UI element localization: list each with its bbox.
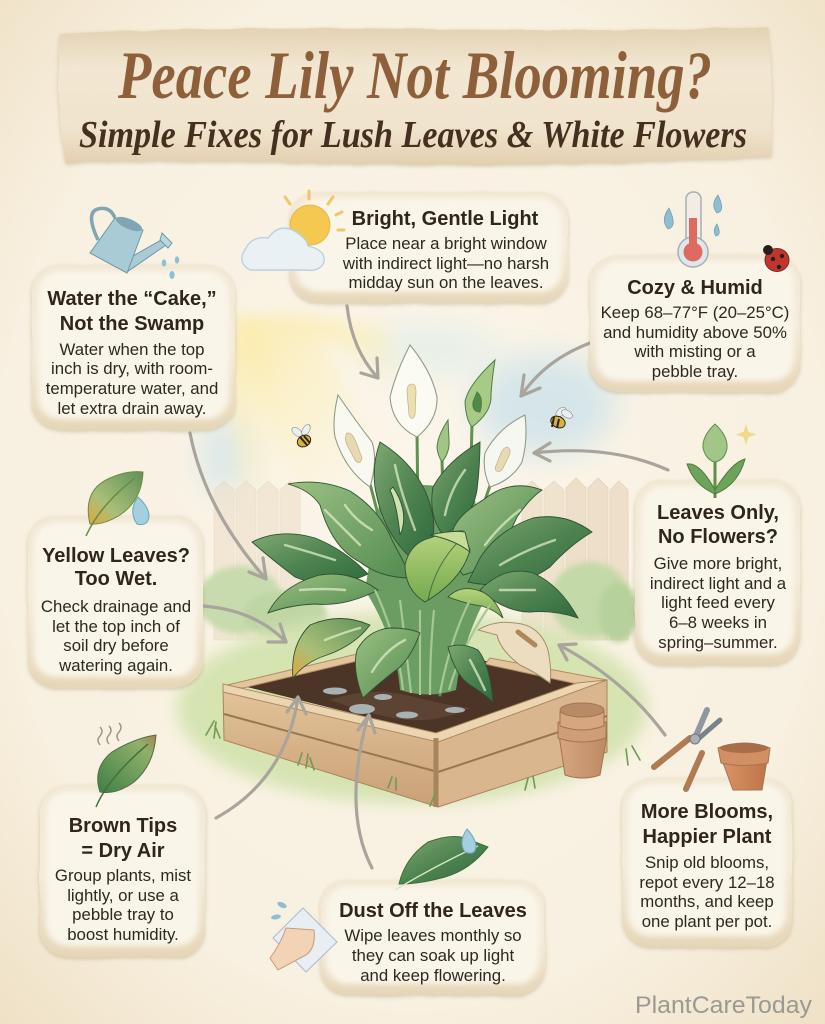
body text: lightly, or use a xyxy=(67,886,179,905)
panel: yellow leaves xyxy=(28,516,203,688)
body text xyxy=(650,554,787,652)
body text: temperature water, and xyxy=(46,379,218,398)
body text: they can soak up light xyxy=(352,946,514,965)
bed right face xyxy=(438,680,607,807)
icon: watering can xyxy=(90,208,179,279)
heading: Dust Off the Leaves xyxy=(339,900,527,922)
body text xyxy=(55,866,191,944)
spathe: right flower xyxy=(484,415,526,487)
body text: indirect light and a xyxy=(650,574,787,593)
arrow: more blooms xyxy=(559,644,665,735)
center bright leaf xyxy=(405,531,470,602)
lawn xyxy=(177,612,647,804)
body text: let the top inch of xyxy=(52,617,180,636)
bee: right xyxy=(549,405,574,430)
body text: Give more bright, xyxy=(654,554,782,573)
raised garden bed xyxy=(223,654,607,807)
bed back rim xyxy=(223,654,607,688)
body text: with misting or a xyxy=(633,342,756,361)
flower stems xyxy=(366,425,492,695)
body text: midday sun on the leaves. xyxy=(349,273,543,292)
body text xyxy=(344,926,522,985)
drooping brown flower xyxy=(478,622,551,683)
body text: boost humidity. xyxy=(67,925,179,944)
heading: No Flowers? xyxy=(658,526,778,548)
icon: ladybug xyxy=(763,245,789,272)
body text: pebble tray to xyxy=(72,905,174,924)
body text: Wipe leaves monthly so xyxy=(344,926,522,945)
heading: Happier Plant xyxy=(643,826,772,848)
title banner xyxy=(58,27,772,164)
body text: watering again. xyxy=(58,656,173,675)
body text: with indirect light—no harsh xyxy=(342,254,549,273)
body text: light feed every xyxy=(661,593,776,612)
body text xyxy=(342,234,549,292)
arrow: yellow leaves xyxy=(203,606,286,642)
back leaves xyxy=(252,442,592,618)
icon: sprout xyxy=(687,424,756,498)
garden scene xyxy=(177,315,647,807)
arrow: light xyxy=(347,306,378,378)
heading: Cozy & Humid xyxy=(627,277,763,299)
sky wash xyxy=(199,326,615,495)
panel: brown tips xyxy=(40,785,205,957)
stacked terracotta pots xyxy=(558,703,607,778)
subtitle: Simple Fixes for Lush Leaves & White Flowers xyxy=(79,114,747,156)
body text: and humidity above 50% xyxy=(603,323,787,342)
body text: months, and keep xyxy=(640,892,774,911)
green buds xyxy=(437,360,495,462)
heading: Too Wet. xyxy=(75,568,157,590)
body text: Keep 68–77°F (20–25°C) xyxy=(601,303,789,322)
base petioles xyxy=(375,590,490,695)
body text xyxy=(41,597,191,675)
body text: spring–summer. xyxy=(658,633,778,652)
body text: 6–8 weeks in xyxy=(669,613,767,632)
body text: Snip old blooms, xyxy=(645,853,769,872)
icon: shiny leaf xyxy=(395,829,488,890)
body text: soil dry before xyxy=(63,636,169,655)
grass tufts xyxy=(206,721,640,806)
icon: pruning shears xyxy=(654,710,720,789)
body text: one plant per pot. xyxy=(642,912,772,931)
icon: yellow leaf and drop xyxy=(86,472,149,536)
body text: let extra drain away. xyxy=(58,399,206,418)
arrow: humidity xyxy=(521,343,590,396)
icon: terracotta pot xyxy=(718,743,770,790)
body text: inch is dry, with room- xyxy=(51,359,213,378)
heading: Bright, Gentle Light xyxy=(352,208,539,230)
bushes xyxy=(198,562,638,642)
body text: Place near a bright window xyxy=(345,234,548,253)
icon: hand with cloth xyxy=(270,901,337,972)
soil xyxy=(243,661,577,734)
lower leaves xyxy=(293,618,493,702)
heading xyxy=(657,502,779,548)
body text xyxy=(639,853,775,931)
heading: Yellow Leaves? xyxy=(42,545,190,567)
panel: bright light xyxy=(290,192,568,303)
panel: leaves only xyxy=(635,480,800,665)
bed top rim and plank lines xyxy=(223,680,607,742)
sun rays xyxy=(222,315,410,490)
arrow: brown tips xyxy=(216,697,306,818)
panel: more blooms xyxy=(622,778,792,947)
arrow: dust xyxy=(356,715,375,868)
heading: Not the Swamp xyxy=(60,313,204,335)
peace lily plant xyxy=(252,345,592,702)
body text xyxy=(601,303,789,381)
body text: and keep flowering. xyxy=(360,966,506,985)
bee: left xyxy=(290,423,313,449)
body text xyxy=(46,340,218,418)
spathe: center flower xyxy=(390,345,437,437)
heading: = Dry Air xyxy=(81,840,165,862)
heading xyxy=(42,545,190,590)
heading xyxy=(641,801,773,848)
panel: dust xyxy=(320,880,545,995)
fence xyxy=(214,478,628,640)
spathe: left flower xyxy=(334,395,375,487)
panel: cozy and humid xyxy=(590,255,800,392)
body text: Water when the top xyxy=(60,340,204,359)
body text: Group plants, mist xyxy=(55,866,191,885)
heading xyxy=(47,288,217,335)
icon: brown tipped leaf xyxy=(96,723,156,807)
body text: pebble tray. xyxy=(652,362,738,381)
bed left face xyxy=(223,686,438,807)
body text: repot every 12–18 xyxy=(639,873,775,892)
foliage backdrop xyxy=(365,485,490,694)
icon: thermometer xyxy=(664,192,722,267)
body text: Check drainage and xyxy=(41,597,191,616)
arrow: water xyxy=(190,433,266,579)
icon: sun and cloud xyxy=(242,191,344,270)
heading: Water the “Cake,” xyxy=(47,288,217,310)
leaf streaks xyxy=(285,465,555,690)
arrow: leaves only xyxy=(534,443,668,470)
heading: More Blooms, xyxy=(641,801,773,823)
heading: Leaves Only, xyxy=(657,502,779,524)
heading: Brown Tips xyxy=(69,815,177,837)
panel: water xyxy=(32,265,235,430)
heading xyxy=(69,815,177,862)
watermark: PlantCareToday xyxy=(635,992,813,1019)
